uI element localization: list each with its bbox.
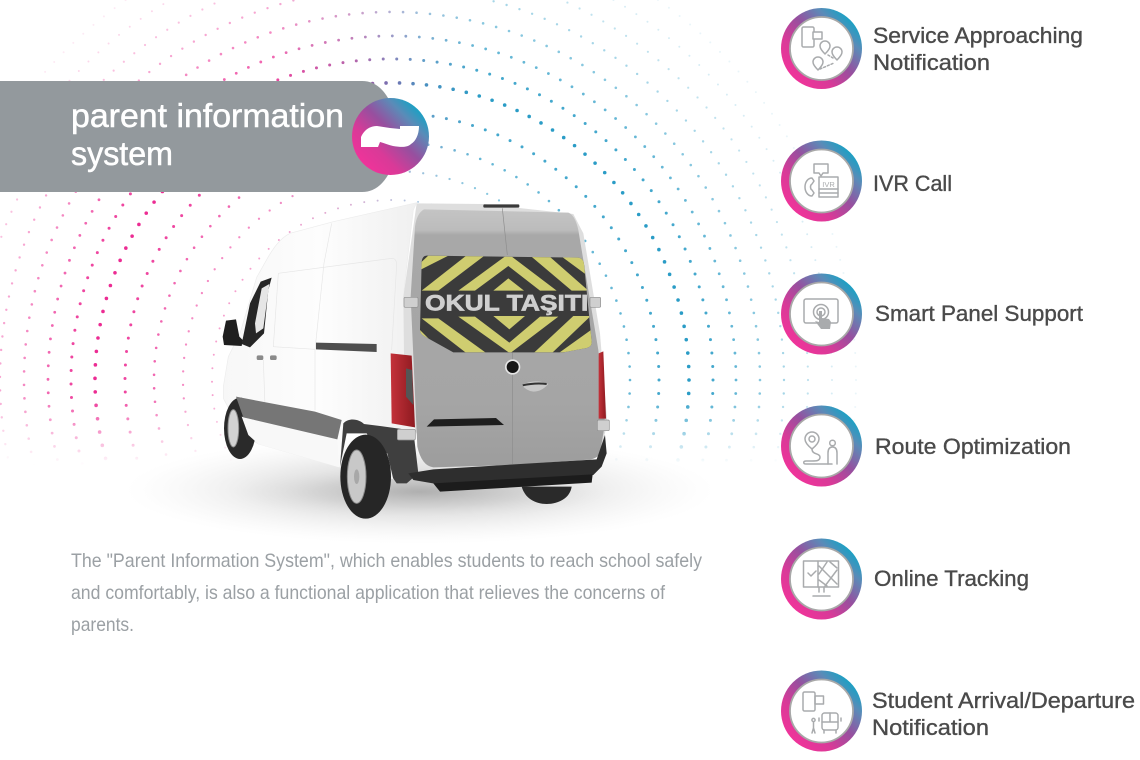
door hinges (397, 297, 609, 440)
rear bumper (408, 435, 607, 492)
right tail light (599, 351, 606, 419)
label: Notification (872, 715, 989, 740)
icon: phone and school bus (803, 692, 841, 733)
brake light strip (483, 204, 519, 208)
dotted signal arcs (0, 0, 856, 470)
feature: route optimization (781, 406, 1071, 486)
label: Route Optimization (875, 434, 1071, 459)
sign text: OKUL TAŞITI (425, 290, 588, 315)
label: Online Tracking (874, 566, 1029, 591)
feature: online tracking (781, 538, 1029, 620)
lower recess (427, 418, 504, 427)
lower white sill (242, 417, 339, 467)
rear camera (505, 359, 520, 375)
rear door panel (411, 209, 605, 467)
van shadow (125, 436, 715, 544)
sliding door rail (316, 343, 377, 352)
label (872, 688, 1135, 740)
school vehicle sign (420, 254, 593, 353)
icon: monitor with map (804, 561, 838, 596)
description paragraph: parents. (71, 614, 134, 636)
far rear wheel (522, 487, 572, 504)
van side body (223, 203, 417, 467)
rear corner panel (340, 420, 418, 483)
description paragraph: The "Parent Information System", which enables students to reach school safely (71, 550, 702, 572)
van illustration (223, 203, 609, 519)
icon: touch panel (804, 299, 838, 329)
rear frame (403, 203, 607, 457)
pill heading text: system (71, 135, 173, 172)
icon: phone and route pins (802, 27, 842, 70)
left tail light (391, 353, 415, 427)
label (873, 23, 1083, 75)
white bumper insert (372, 451, 393, 479)
label: Student Arrival/Departure (872, 688, 1135, 713)
wing mirror (223, 319, 243, 346)
feature: service approaching notification (781, 8, 1083, 89)
icon: ivr phone: IVR (822, 180, 835, 189)
label: Notification (873, 50, 990, 75)
rear wheel (340, 435, 391, 519)
description paragraph (71, 550, 702, 636)
sill strip (236, 397, 342, 439)
door seam (502, 208, 513, 464)
label: Smart Panel Support (875, 301, 1083, 326)
icon: ivr phone (805, 164, 838, 197)
feature: smart panel support (781, 274, 1083, 354)
feature: student arrival departure notification (781, 670, 1135, 752)
front wheel (224, 398, 256, 459)
side panel lines (263, 223, 397, 410)
header badge icon (352, 98, 429, 175)
header pill (0, 81, 388, 192)
side window (242, 278, 272, 347)
door handle (522, 381, 548, 392)
door handles (257, 355, 277, 360)
icon: pin and person (804, 432, 837, 464)
label: IVR Call (873, 171, 952, 196)
description paragraph: and comfortably, is also a functional application that relieves the concerns of (71, 582, 666, 604)
pill heading text (71, 97, 344, 172)
label: Service Approaching (873, 23, 1083, 48)
pill heading text: parent information (71, 97, 344, 134)
feature: ivr call (781, 140, 952, 222)
